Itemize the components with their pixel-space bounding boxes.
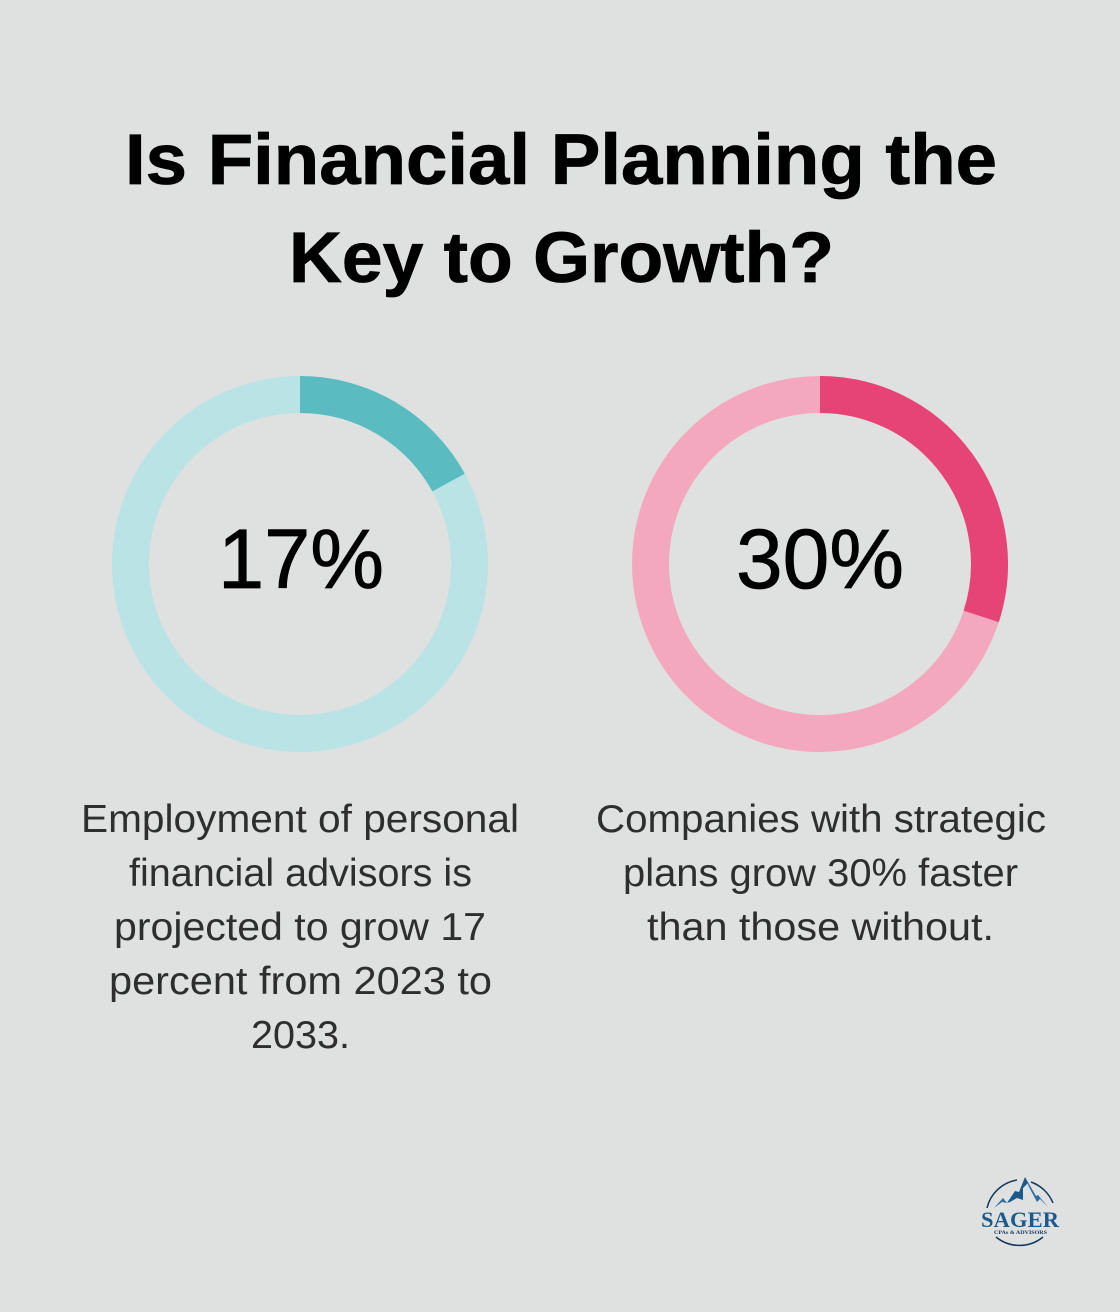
logo: Sager CPAs & Advisors <box>981 1177 1060 1245</box>
description: strategic plans: Companies with strategic <box>596 798 1046 841</box>
panel: 30% statistic <box>596 394 1046 949</box>
description: advisors: 2033. <box>251 1014 350 1057</box>
description: advisors: financial advisors is <box>129 852 472 895</box>
title: Is Financial Planning the <box>125 121 997 200</box>
value: 30%: 30% <box>736 512 904 606</box>
logo tagline: CPAs & ADVISORS <box>994 1231 1047 1236</box>
title: Key to Growth? <box>289 219 834 298</box>
title <box>125 121 997 298</box>
icon: mountains <box>994 1177 1048 1208</box>
value: 17%: 17% <box>218 512 384 606</box>
description: strategic plans <box>596 798 1046 949</box>
description: advisors <box>81 798 519 1057</box>
donut chart: 17% <box>130 394 470 734</box>
description: advisors: percent from 2023 to <box>109 960 492 1003</box>
panel: 17% statistic <box>81 394 519 1057</box>
donut chart: 30% <box>650 394 990 734</box>
icon: ring arcs <box>987 1180 1053 1245</box>
description: advisors: Employment of personal <box>81 798 519 841</box>
logo wordmark: SAGER <box>981 1207 1060 1232</box>
description: strategic plans: than those without. <box>647 906 994 949</box>
description: strategic plans: plans grow 30% faster <box>623 852 1018 895</box>
description: advisors: projected to grow 17 <box>114 906 486 949</box>
